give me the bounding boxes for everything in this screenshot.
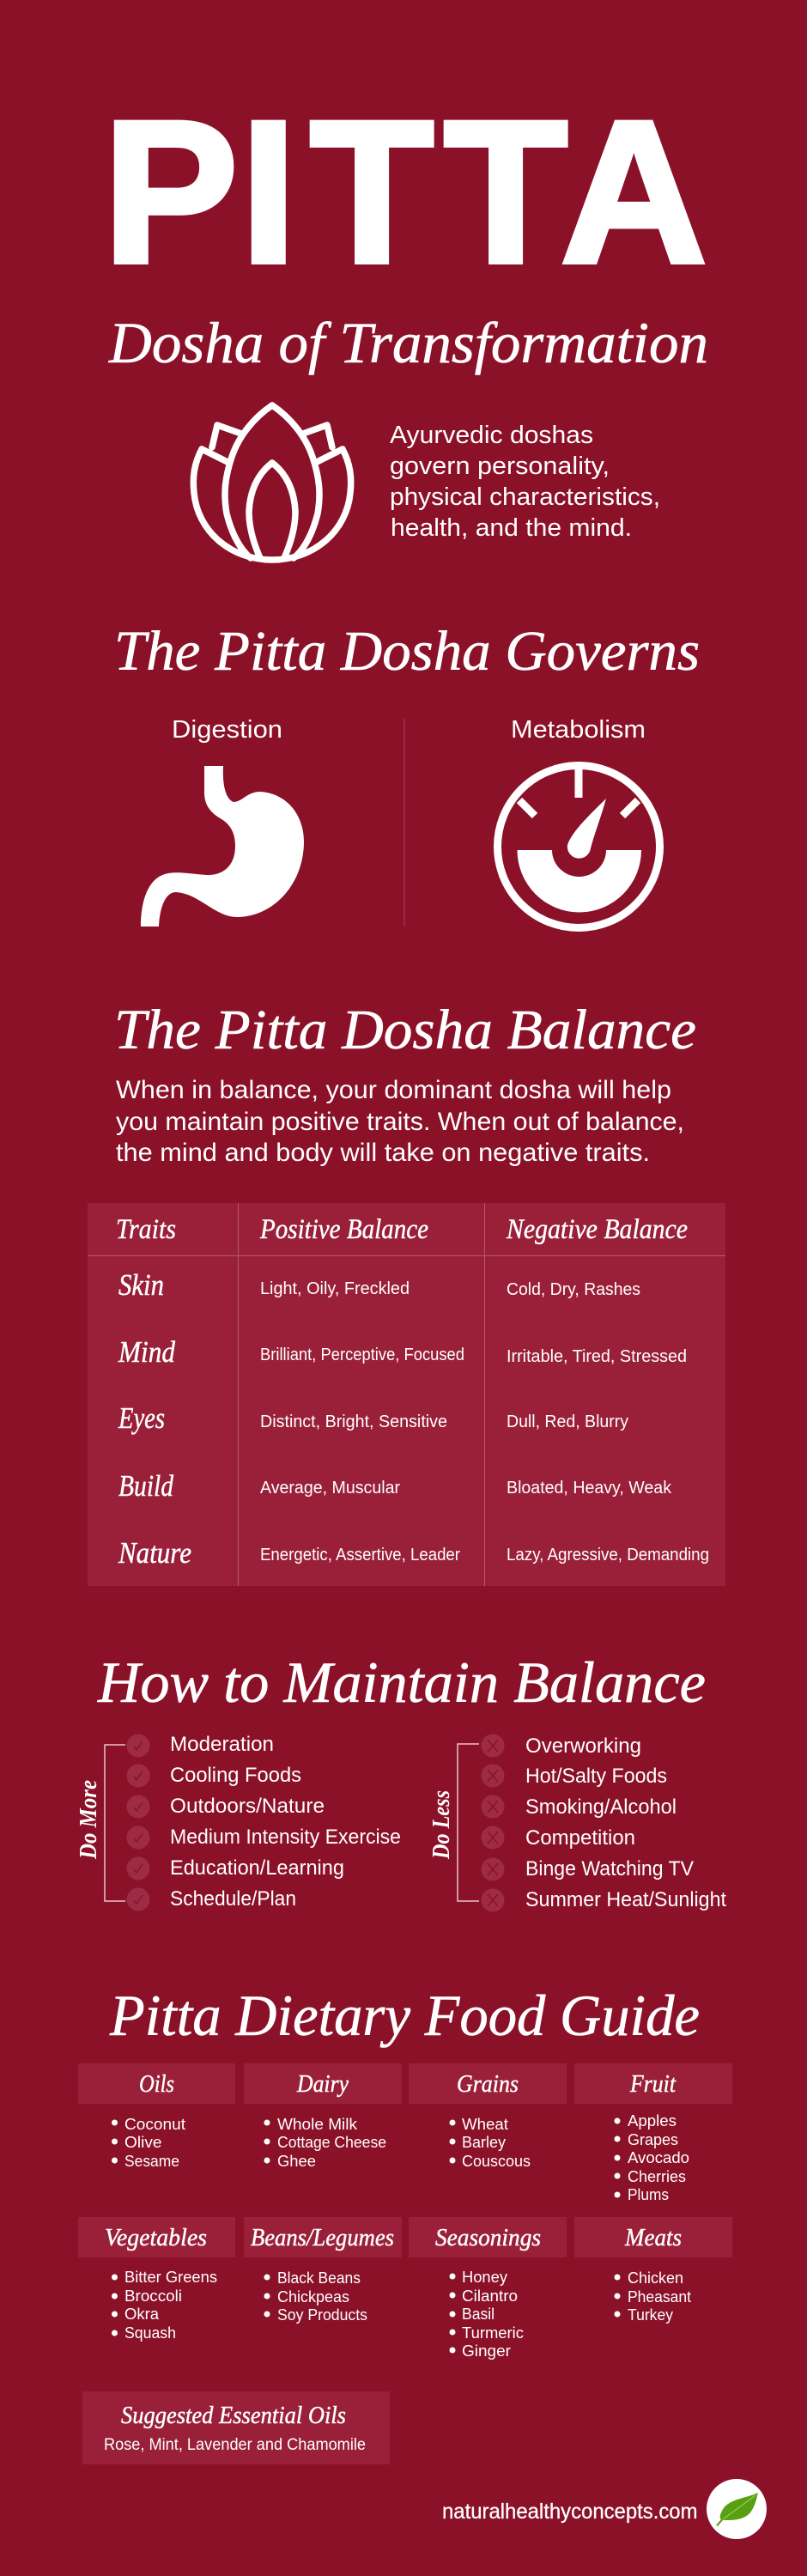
food group: Oils: Olive bbox=[124, 2133, 161, 2151]
food group: Fruit: Grapes bbox=[628, 2130, 678, 2148]
food group: Dairy: Cottage Cheese bbox=[277, 2133, 386, 2151]
food group: Meats: Pheasant bbox=[628, 2287, 691, 2306]
food group: Vegetables: Vegetables bbox=[105, 2224, 207, 2251]
negative balance values: Irritable, Tired, Stressed bbox=[507, 1347, 687, 1366]
website url: naturalhealthyconcepts.com bbox=[442, 2500, 697, 2524]
negative balance values: Dull, Red, Blurry bbox=[507, 1413, 628, 1431]
table header: Traits bbox=[116, 1214, 176, 1245]
text block: intro: health, and the mind. bbox=[391, 514, 632, 542]
items: Summer Heat/Sunlight bbox=[525, 1888, 726, 1911]
icons: x circles bbox=[481, 1735, 505, 1911]
food group: Grains: Wheat bbox=[462, 2115, 508, 2133]
positive balance values: Brilliant, Perceptive, Focused bbox=[260, 1346, 464, 1364]
food group: Dairy: Ghee bbox=[277, 2152, 316, 2170]
food group: Fruit: Apples bbox=[628, 2111, 677, 2129]
negative balance values: Bloated, Heavy, Weak bbox=[507, 1479, 672, 1498]
items bbox=[170, 1733, 401, 1911]
food group: Dairy: Whole Milk bbox=[277, 2115, 358, 2133]
items bbox=[525, 1735, 726, 1911]
heading: The Pitta Dosha Balance: The Pitta Dosha Balance bbox=[114, 999, 696, 1061]
text block: balance explanation: you maintain positive traits. When out of balance, bbox=[116, 1108, 684, 1136]
icon: lotus bbox=[193, 405, 351, 560]
food group: Vegetables: Squash bbox=[124, 2324, 176, 2342]
food group: Fruit: Fruit bbox=[629, 2070, 677, 2098]
panel: suggested essential oils: Suggested Essential Oils bbox=[121, 2402, 346, 2429]
food group: Oils: Oils bbox=[139, 2070, 174, 2098]
food group: Meats bbox=[574, 2217, 732, 2324]
negative balance values: Lazy, Agressive, Demanding bbox=[507, 1546, 709, 1564]
food group: Grains: Barley bbox=[462, 2133, 507, 2151]
food group: Beans/Legumes: Beans/Legumes bbox=[251, 2224, 394, 2251]
row labels bbox=[118, 1268, 191, 1570]
row labels: Nature bbox=[118, 1536, 191, 1570]
food group: Grains: Grains bbox=[457, 2070, 519, 2098]
food group: Fruit: Avocado bbox=[628, 2148, 689, 2166]
food group: Seasonings: Basil bbox=[462, 2305, 495, 2323]
text block: balance explanation: the mind and body will take on negative traits. bbox=[116, 1139, 650, 1167]
items: Binge Watching TV bbox=[525, 1857, 695, 1880]
food group: Fruit: Cherries bbox=[628, 2167, 686, 2185]
food group: Dairy: Dairy bbox=[296, 2070, 349, 2098]
positive balance values: Energetic, Assertive, Leader bbox=[260, 1546, 460, 1564]
food group: Seasonings: Seasonings bbox=[435, 2224, 541, 2251]
table header bbox=[116, 1214, 688, 1245]
positive balance values: Light, Oily, Freckled bbox=[260, 1279, 410, 1298]
items: Smoking/Alcohol bbox=[525, 1795, 677, 1819]
food group: Vegetables: Bitter Greens bbox=[124, 2268, 217, 2286]
food group: Beans/Legumes: Chickpeas bbox=[277, 2287, 349, 2306]
heading: The Pitta Dosha Governs: The Pitta Dosha Governs bbox=[114, 620, 700, 683]
text block: intro: physical characteristics, bbox=[390, 483, 660, 511]
food group: Dairy bbox=[244, 2063, 402, 2170]
food group: Beans/Legumes: Black Beans bbox=[277, 2269, 361, 2287]
table: balance traits bbox=[88, 1203, 725, 1586]
heading: How to Maintain Balance: How to Maintain Balance bbox=[97, 1649, 706, 1715]
food group: Oils: Coconut bbox=[124, 2115, 185, 2133]
food group: Meats: Chicken bbox=[628, 2269, 683, 2287]
negative balance values: Cold, Dry, Rashes bbox=[507, 1280, 640, 1299]
label: Do More: Do More bbox=[76, 1780, 102, 1860]
food group: Vegetables: Broccoli bbox=[124, 2287, 182, 2305]
items: Competition bbox=[525, 1826, 635, 1850]
panel: suggested essential oils: Rose, Mint, Lavender and Chamomile bbox=[104, 2436, 366, 2454]
food group: Seasonings: Cilantro bbox=[462, 2287, 518, 2305]
text block: intro: Ayurvedic doshas bbox=[390, 422, 593, 449]
food group: Vegetables: Okra bbox=[124, 2305, 160, 2323]
table header: Positive Balance bbox=[259, 1214, 428, 1245]
row labels: Eyes bbox=[118, 1401, 165, 1435]
items: Education/Learning bbox=[170, 1856, 344, 1880]
food group: Grains: Couscous bbox=[462, 2152, 531, 2170]
positive balance values: Average, Muscular bbox=[260, 1479, 400, 1498]
negative balance values bbox=[507, 1280, 709, 1564]
text block: intro: govern personality, bbox=[390, 453, 610, 480]
food group: Oils: Sesame bbox=[124, 2152, 179, 2170]
food group: Seasonings bbox=[409, 2217, 567, 2360]
icon: metabolism gauge bbox=[498, 766, 659, 927]
row labels: Mind bbox=[118, 1335, 175, 1369]
text block: intro bbox=[390, 422, 660, 542]
icon: stomach bbox=[141, 766, 304, 927]
title: PITTA: PITTA bbox=[103, 79, 707, 306]
food group: Seasonings: Turmeric bbox=[462, 2324, 524, 2342]
row labels: Skin bbox=[118, 1268, 164, 1302]
food group: Fruit bbox=[574, 2063, 732, 2203]
label: Metabolism: Metabolism bbox=[511, 716, 646, 744]
heading: Pitta Dietary Food Guide: Pitta Dietary Food Guide bbox=[109, 1983, 700, 2048]
panel: suggested essential oils bbox=[82, 2391, 390, 2464]
text block: balance explanation: When in balance, your dominant dosha will help bbox=[116, 1076, 671, 1104]
list: do more bbox=[76, 1733, 401, 1911]
items: Moderation bbox=[170, 1733, 274, 1756]
food group: Grains bbox=[409, 2063, 567, 2170]
positive balance values bbox=[260, 1279, 464, 1564]
items: Outdoors/Nature bbox=[170, 1795, 325, 1818]
items: Hot/Salty Foods bbox=[525, 1765, 667, 1788]
text block: balance explanation bbox=[116, 1076, 684, 1167]
row labels: Build bbox=[118, 1469, 173, 1503]
list: do less bbox=[428, 1735, 726, 1911]
food group: Vegetables bbox=[78, 2217, 235, 2342]
food group: Fruit: Plums bbox=[628, 2185, 669, 2203]
items: Schedule/Plan bbox=[170, 1887, 296, 1911]
subtitle: Dosha of Transformation: Dosha of Transformation bbox=[108, 310, 708, 375]
food group: Oils bbox=[78, 2063, 235, 2170]
food group: Seasonings: Honey bbox=[462, 2268, 508, 2286]
food group: Meats: Meats bbox=[624, 2224, 682, 2251]
label: Digestion: Digestion bbox=[172, 716, 282, 744]
label: Do Less: Do Less bbox=[428, 1790, 455, 1860]
table header: Negative Balance bbox=[506, 1214, 688, 1245]
icon: leaf logo bbox=[707, 2479, 767, 2539]
icons: check circles bbox=[127, 1735, 149, 1911]
items: Cooling Foods bbox=[170, 1764, 301, 1787]
food group: Seasonings: Ginger bbox=[462, 2342, 511, 2360]
food group: Beans/Legumes: Soy Products bbox=[277, 2306, 367, 2324]
food group: Meats: Turkey bbox=[628, 2306, 674, 2324]
positive balance values: Distinct, Bright, Sensitive bbox=[260, 1413, 447, 1431]
items: Overworking bbox=[525, 1735, 641, 1758]
food group: Beans/Legumes bbox=[244, 2217, 402, 2324]
items: Medium Intensity Exercise bbox=[170, 1826, 401, 1849]
